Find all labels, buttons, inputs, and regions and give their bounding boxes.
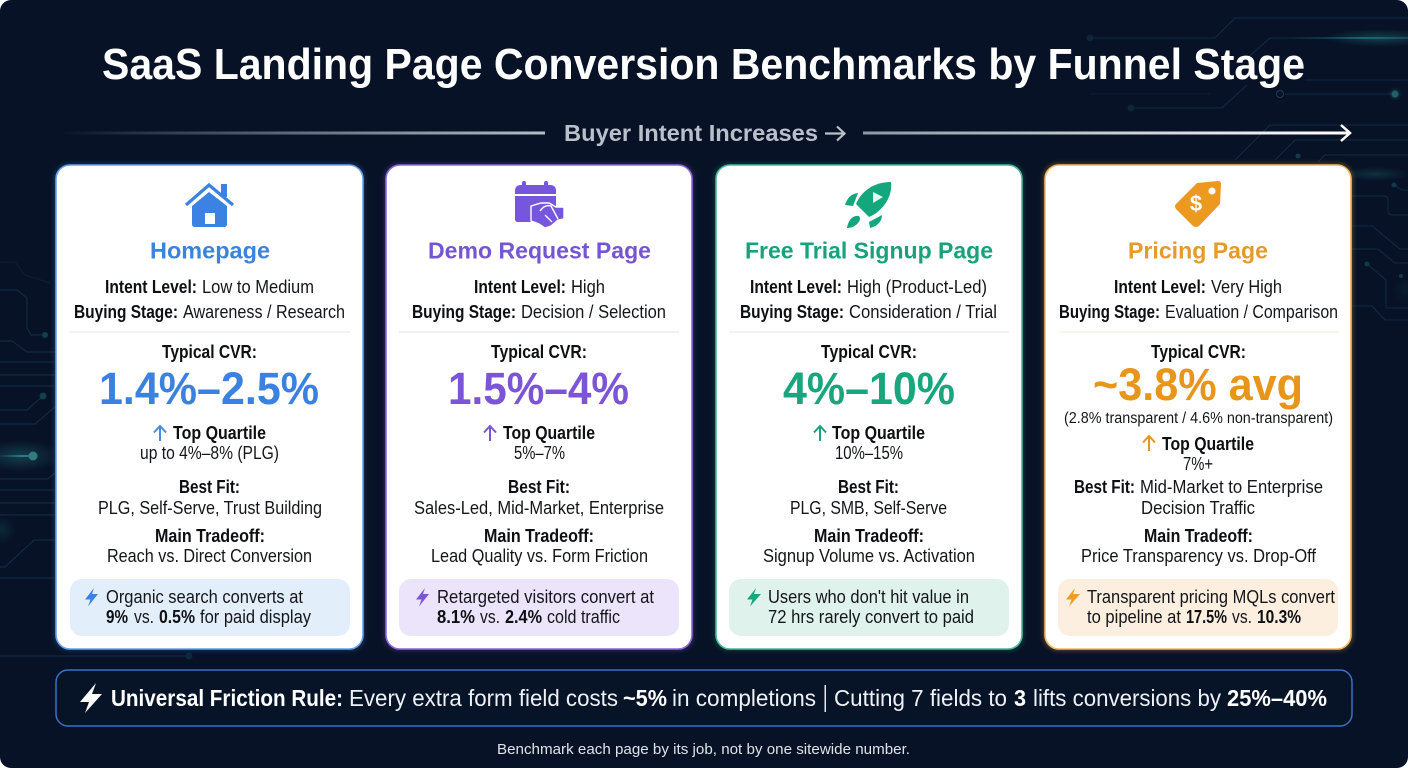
buying stage: Decision / Selection (521, 301, 666, 322)
best fit: Best Fit: (179, 476, 240, 497)
best fit: Mid-Market to Enterprise (1140, 476, 1323, 497)
buying stage: Consideration / Trial (849, 301, 997, 322)
callout (399, 579, 679, 636)
buying stage: Awareness / Research (183, 301, 345, 322)
main tradeoff (763, 525, 975, 566)
best fit: Best Fit: (838, 476, 899, 497)
best fit (1074, 476, 1323, 518)
callout: 17.5% (1186, 606, 1227, 627)
intent level (105, 276, 314, 297)
cvr value: 4%–10% (783, 363, 955, 414)
intent level: Intent Level: (474, 276, 566, 297)
best fit (98, 476, 322, 518)
main tradeoff: Price Transparency vs. Drop-Off (1081, 545, 1317, 566)
main tradeoff (107, 525, 312, 566)
intent level: Intent Level: (1114, 276, 1206, 297)
best fit: Best Fit: (1074, 476, 1135, 497)
callout (729, 579, 1009, 636)
typical cvr label: Typical CVR: (491, 341, 587, 362)
intent level: Very High (1211, 276, 1282, 297)
buying stage: Evaluation / Comparison (1165, 301, 1338, 322)
top quartile: up to 4%–8% (PLG) (140, 442, 279, 463)
intent level: High (Product-Led) (847, 276, 987, 297)
heading: homepage: Homepage (150, 238, 270, 264)
glowing circuit node: left (0, 440, 60, 544)
callout (1058, 579, 1338, 636)
callout: Transparent pricing MQLs convert (1087, 586, 1335, 607)
intent level: Intent Level: (105, 276, 197, 297)
universal friction rule banner: 3 (1014, 685, 1026, 711)
icon: house (186, 184, 233, 227)
glowing circuit node: right (1290, 29, 1408, 302)
heading: demo request page: Demo Request Page (428, 238, 651, 264)
best fit: PLG, Self-Serve, Trust Building (98, 497, 322, 518)
callout: to pipeline at (1087, 606, 1181, 627)
universal friction rule banner: 25%–40% (1227, 685, 1327, 711)
callout: 0.5% (159, 606, 195, 627)
title: SaaS Landing Page Conversion Benchmarks by Funnel Stage (102, 41, 1305, 89)
typical cvr label: Typical CVR: (1151, 341, 1246, 362)
main tradeoff: Main Tradeoff: (1144, 525, 1253, 546)
callout: vs. (1232, 606, 1252, 627)
cvr value: 1.4%–2.5% (99, 363, 319, 414)
top quartile: 7%+ (1183, 453, 1213, 474)
intent level (1114, 276, 1282, 297)
buyer intent arrow (60, 120, 1350, 146)
main tradeoff (1081, 525, 1317, 566)
icon: rocket (845, 182, 891, 228)
main tradeoff: Main Tradeoff: (814, 525, 924, 546)
top quartile (484, 422, 595, 463)
universal friction rule banner: Universal Friction Rule: (111, 685, 343, 711)
buying stage (74, 301, 345, 322)
main tradeoff: Main Tradeoff: (484, 525, 594, 546)
buying stage (740, 301, 997, 322)
top quartile: Top Quartile (832, 422, 925, 443)
circuit pattern: left side (0, 262, 192, 660)
main tradeoff: Reach vs. Direct Conversion (107, 545, 312, 566)
buying stage: Buying Stage: (740, 301, 844, 322)
icon: calendar handshake (515, 181, 564, 228)
heading: free trial signup page: Free Trial Signup Page (745, 238, 993, 264)
icon: price tag: $ (1190, 191, 1202, 216)
best fit: Sales-Led, Mid-Market, Enterprise (414, 497, 664, 518)
buying stage: Buying Stage: (74, 301, 178, 322)
universal friction rule banner: Cutting 7 fields to (834, 685, 1007, 711)
cvr note: (2.8% transparent / 4.6% non-transparent) (1064, 410, 1333, 427)
panel: free trial signup page (714, 163, 1024, 651)
callout: Users who don't hit value in (768, 586, 969, 607)
callout: 72 hrs rarely convert to paid (768, 606, 974, 627)
intent level: Intent Level: (750, 276, 842, 297)
best fit (414, 476, 664, 518)
universal friction rule banner: lifts conversions by (1033, 685, 1221, 711)
icon: price tag (1175, 181, 1221, 227)
main tradeoff: Lead Quality vs. Form Friction (431, 545, 648, 566)
top quartile: Top Quartile (503, 422, 595, 443)
panel: pricing page (1043, 163, 1353, 651)
buyer intent arrow: Buyer Intent Increases (564, 120, 818, 146)
universal friction rule banner (56, 670, 1352, 726)
best fit: Best Fit: (508, 476, 570, 497)
callout: Retargeted visitors convert at (437, 586, 654, 607)
icon: white lightning bolt (80, 683, 102, 713)
universal friction rule banner: ~5% (623, 685, 667, 711)
top quartile: 10%–15% (835, 442, 903, 463)
top quartile: 5%–7% (514, 442, 565, 463)
universal friction rule banner: Every extra form field costs (349, 685, 618, 711)
cvr value: 1.5%–4% (448, 363, 629, 414)
intent level (750, 276, 987, 297)
circuit pattern: right side (1086, 18, 1408, 320)
heading: pricing page: Pricing Page (1128, 238, 1268, 264)
top quartile (1143, 433, 1254, 474)
main tradeoff (431, 525, 648, 566)
best fit: PLG, SMB, Self-Serve (790, 497, 947, 518)
typical cvr label: Typical CVR: (821, 341, 917, 362)
intent level: Low to Medium (202, 276, 314, 297)
buying stage: Buying Stage: (412, 301, 516, 322)
main tradeoff: Main Tradeoff: (155, 525, 265, 546)
typical cvr label: Typical CVR: (162, 341, 257, 362)
best fit (790, 476, 947, 518)
panel: homepage (54, 163, 365, 651)
callout: for paid display (200, 606, 312, 627)
callout (70, 579, 350, 636)
buying stage: Buying Stage: (1059, 301, 1160, 322)
buying stage (412, 301, 666, 322)
main tradeoff: Signup Volume vs. Activation (763, 545, 975, 566)
buying stage (1059, 301, 1338, 322)
callout: 8.1% (437, 606, 475, 627)
callout: vs. (480, 606, 500, 627)
cvr value: ~3.8% avg (1093, 359, 1303, 410)
footer note: Benchmark each page by its job, not by one sitewide number. (497, 741, 910, 758)
callout: 9% (106, 606, 128, 627)
callout: 10.3% (1257, 606, 1301, 627)
callout: vs. (134, 606, 154, 627)
panel: demo request page (384, 163, 694, 651)
top quartile (814, 422, 925, 463)
best fit: Decision Traffic (1141, 497, 1255, 518)
intent level: High (571, 276, 605, 297)
top quartile: Top Quartile (1162, 433, 1254, 454)
universal friction rule banner: in completions (672, 685, 816, 711)
callout: cold traffic (547, 606, 620, 627)
callout: Organic search converts at (106, 586, 303, 607)
top quartile: Top Quartile (173, 422, 266, 443)
top quartile (140, 422, 279, 463)
callout: 2.4% (505, 606, 542, 627)
